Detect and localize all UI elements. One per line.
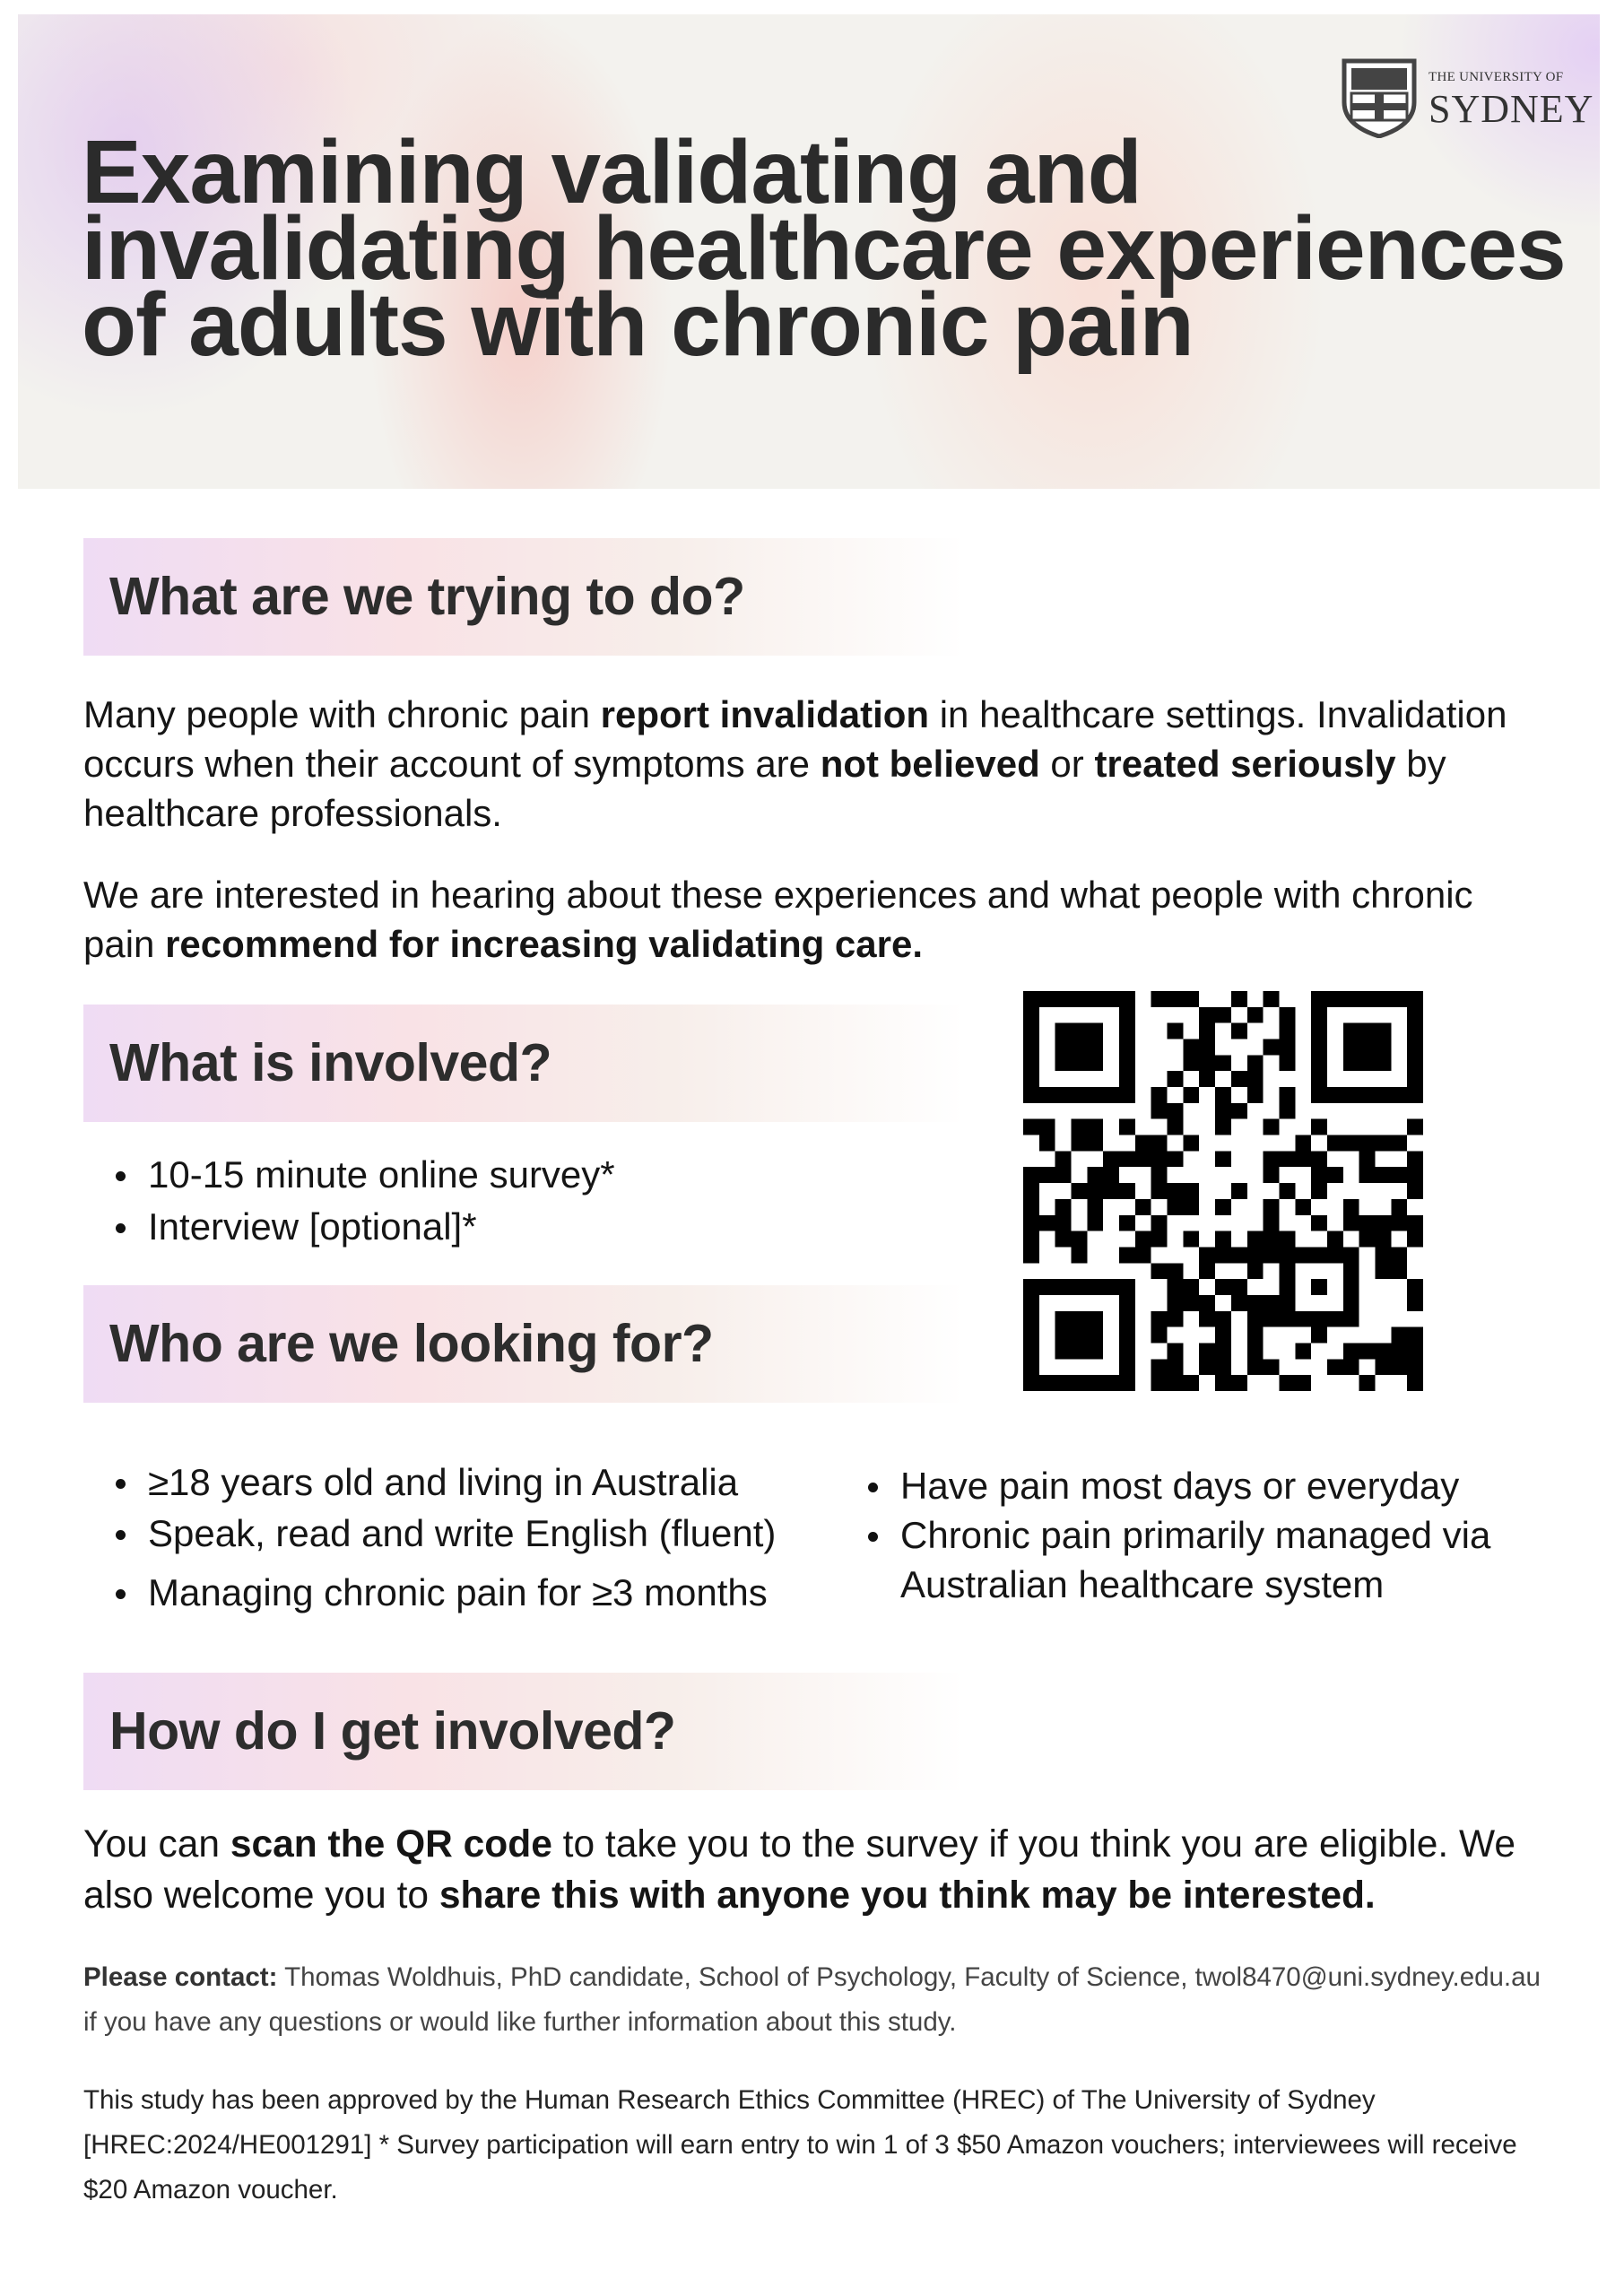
paragraph: aims: occurs when their account of symptoms are not believed or treated seriously by: [83, 743, 1446, 785]
ethics note: $20 Amazon voucher.: [83, 2175, 338, 2205]
header banner: [18, 14, 1600, 489]
list: involvement: 10-15 minute online survey*: [148, 1153, 615, 1196]
list: eligibility right: [868, 1465, 1490, 1605]
heading: What are we trying to do?: What are we trying to do?: [109, 567, 745, 626]
list: eligibility left: ≥18 years old and living in Australia: [148, 1461, 738, 1503]
heading: What are we trying to do?: [83, 538, 1551, 656]
paragraph: interest: pain recommend for increasing validating care.: [83, 923, 923, 965]
ethics note: [83, 2085, 1517, 2205]
heading: What is involved?: [83, 1004, 1551, 1122]
heading: What is involved?: What is involved?: [109, 1033, 551, 1092]
title: Examining validating and: [82, 122, 1142, 222]
list: involvement: [116, 1153, 615, 1248]
paragraph: how to participate: also welcome you to share this with anyone you think may be interested.: [83, 1874, 1376, 1917]
list: eligibility right: Australian healthcare system: [900, 1563, 1384, 1605]
list: eligibility right: Have pain most days or everyday: [900, 1465, 1459, 1507]
list: involvement: Interview [optional]*: [148, 1205, 477, 1248]
title: [82, 122, 1566, 375]
contact text: Please contact: Thomas Woldhuis, PhD candidate, School of Psychology, Faculty of Science, twol8470@uni.sydney.edu.au: [83, 1962, 1541, 1992]
title: invalidating healthcare experiences: [82, 198, 1566, 299]
list: eligibility left: [116, 1461, 776, 1613]
ethics note: This study has been approved by the Human Research Ethics Committee (HREC) of The University of Sydney: [83, 2085, 1376, 2115]
list: eligibility left: Speak, read and write English (fluent): [148, 1512, 776, 1554]
paragraph: aims: Many people with chronic pain report invalidation in healthcare settings. Invalidation: [83, 693, 1507, 735]
paragraph: how to participate: You can scan the QR code to take you to the survey if you think you are eligible. We: [83, 1823, 1515, 1866]
ethics note: [HREC:2024/HE001291] * Survey participation will earn entry to win 1 of 3 $50 Amazon vouchers; interviewees will receive: [83, 2130, 1517, 2160]
list: eligibility right: Chronic pain primarily managed via: [900, 1514, 1490, 1556]
heading: Who are we looking for?: [83, 1285, 1551, 1403]
paragraph: how to participate: [83, 1823, 1515, 1917]
logo: University of Sydney: SYDNEY: [1429, 87, 1594, 131]
contact text: [83, 1962, 1541, 2037]
paragraph: interest: We are interested in hearing about these experiences and what people with chronic: [83, 874, 1473, 916]
heading: How do I get involved?: [83, 1673, 1551, 1790]
paragraph: aims: healthcare professionals.: [83, 792, 502, 834]
paragraph: aims: [83, 693, 1507, 834]
heading: Who are we looking for?: Who are we looking for?: [109, 1314, 714, 1373]
contact text: if you have any questions or would like further information about this study.: [83, 2007, 956, 2037]
logo: University of Sydney: [1342, 59, 1594, 138]
paragraph: interest: [83, 874, 1473, 965]
logo: University of Sydney: THE UNIVERSITY OF: [1429, 70, 1563, 84]
list: eligibility left: Managing chronic pain for ≥3 months: [148, 1571, 768, 1613]
QR code: [1016, 984, 1430, 1398]
title: of adults with chronic pain: [82, 274, 1194, 375]
heading: How do I get involved?: How do I get involved?: [109, 1701, 675, 1761]
